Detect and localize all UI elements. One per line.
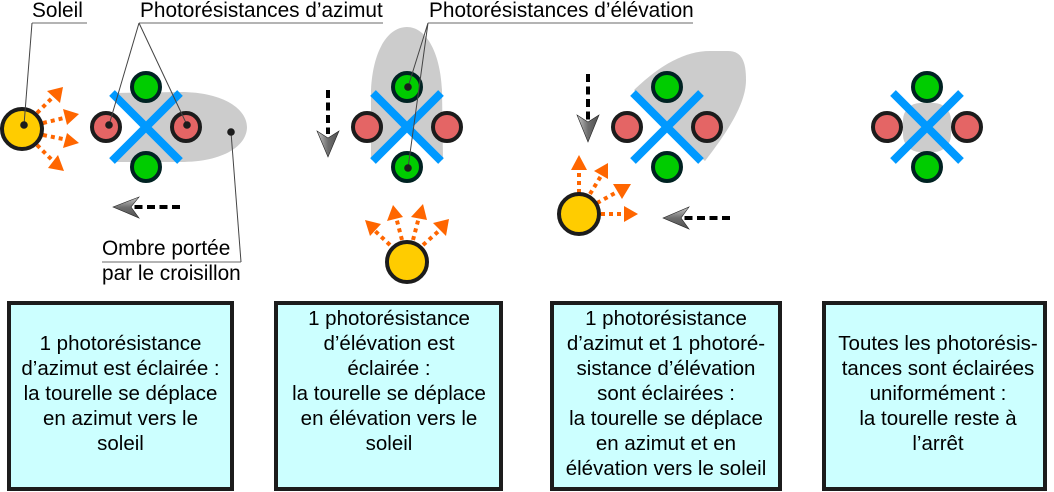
label: cast shadow: Ombre portée: [102, 237, 230, 260]
cast shadow, elevation: [371, 27, 443, 160]
text box: azimuth and elevation: la tourelle se déplace: [569, 407, 763, 430]
sensor cross, balanced: [873, 73, 981, 181]
text box: elevation: éclairée :: [347, 357, 431, 380]
sensor cross, elevation: [353, 73, 461, 181]
sun with rays, lower left: [559, 155, 638, 234]
panel: balanced diagram: [873, 73, 981, 181]
sensor cross, azimuth: [92, 73, 200, 181]
text box: at rest: tances sont éclairées: [842, 357, 1034, 380]
text box: elevation: la tourelle se déplace: [292, 382, 486, 405]
label: Soleil: [20, 0, 87, 129]
panel: elevation diagram: [317, 27, 461, 282]
text box: azimuth and elevation: élévation vers le soleil: [566, 457, 766, 480]
text box: azimuth and elevation: en azimut et en: [596, 432, 736, 455]
label: cast shadow: [102, 128, 241, 285]
text box: elevation: d’élévation est: [323, 332, 455, 355]
cast shadow, azimuth: [114, 92, 247, 162]
cast shadow, diagonal: [634, 51, 746, 161]
text box: at rest: Toutes les photorésis-: [838, 332, 1038, 355]
text box: azimuth and elevation: d’azimut et 1 photoré-: [567, 332, 765, 355]
label: elevation photoresistors: [404, 0, 694, 172]
text box: at rest: l’arrêt: [912, 432, 964, 455]
text box: azimuth and elevation: sont éclairées :: [597, 382, 735, 405]
movement arrow, down: [317, 90, 339, 157]
panel: combined diagram: [559, 51, 746, 234]
sensor cross, combined: [613, 73, 721, 181]
movement arrow, down: [577, 74, 599, 142]
text box: azimuth: d’azimut est éclairée :: [21, 357, 220, 380]
text box: azimuth: soleil: [97, 432, 144, 455]
text box: azimuth: [9, 303, 232, 489]
text box: elevation: 1 photorésistance: [308, 307, 470, 330]
sun with rays, left: [2, 87, 79, 171]
text box: elevation: en élévation vers le: [301, 407, 477, 430]
text box: azimuth: 1 photorésistance: [40, 332, 201, 355]
movement arrow, left: [113, 197, 180, 218]
text box: at rest: uniformément :: [870, 382, 1006, 405]
label: cast shadow: par le croisillon: [102, 262, 241, 285]
label: azimuth photoresistors: [105, 0, 383, 129]
text box: elevation: [276, 303, 501, 489]
text box: azimuth and elevation: 1 photorésistance: [585, 307, 747, 330]
text box: azimuth: en azimut vers le: [43, 407, 198, 430]
text box: azimuth and elevation: [552, 303, 780, 489]
movement arrow, left: [663, 207, 730, 229]
text box: azimuth and elevation: sistance d’élévation: [577, 357, 755, 380]
uniform small shadow: [903, 103, 951, 152]
text box: elevation: soleil: [366, 432, 412, 455]
text box: at rest: [824, 303, 1045, 489]
panel: azimuth diagram: [2, 73, 247, 218]
text box: at rest: la tourelle reste à: [859, 407, 1017, 430]
sun with rays, bottom: [365, 204, 449, 282]
text box: azimuth: la tourelle se déplace: [24, 382, 217, 405]
